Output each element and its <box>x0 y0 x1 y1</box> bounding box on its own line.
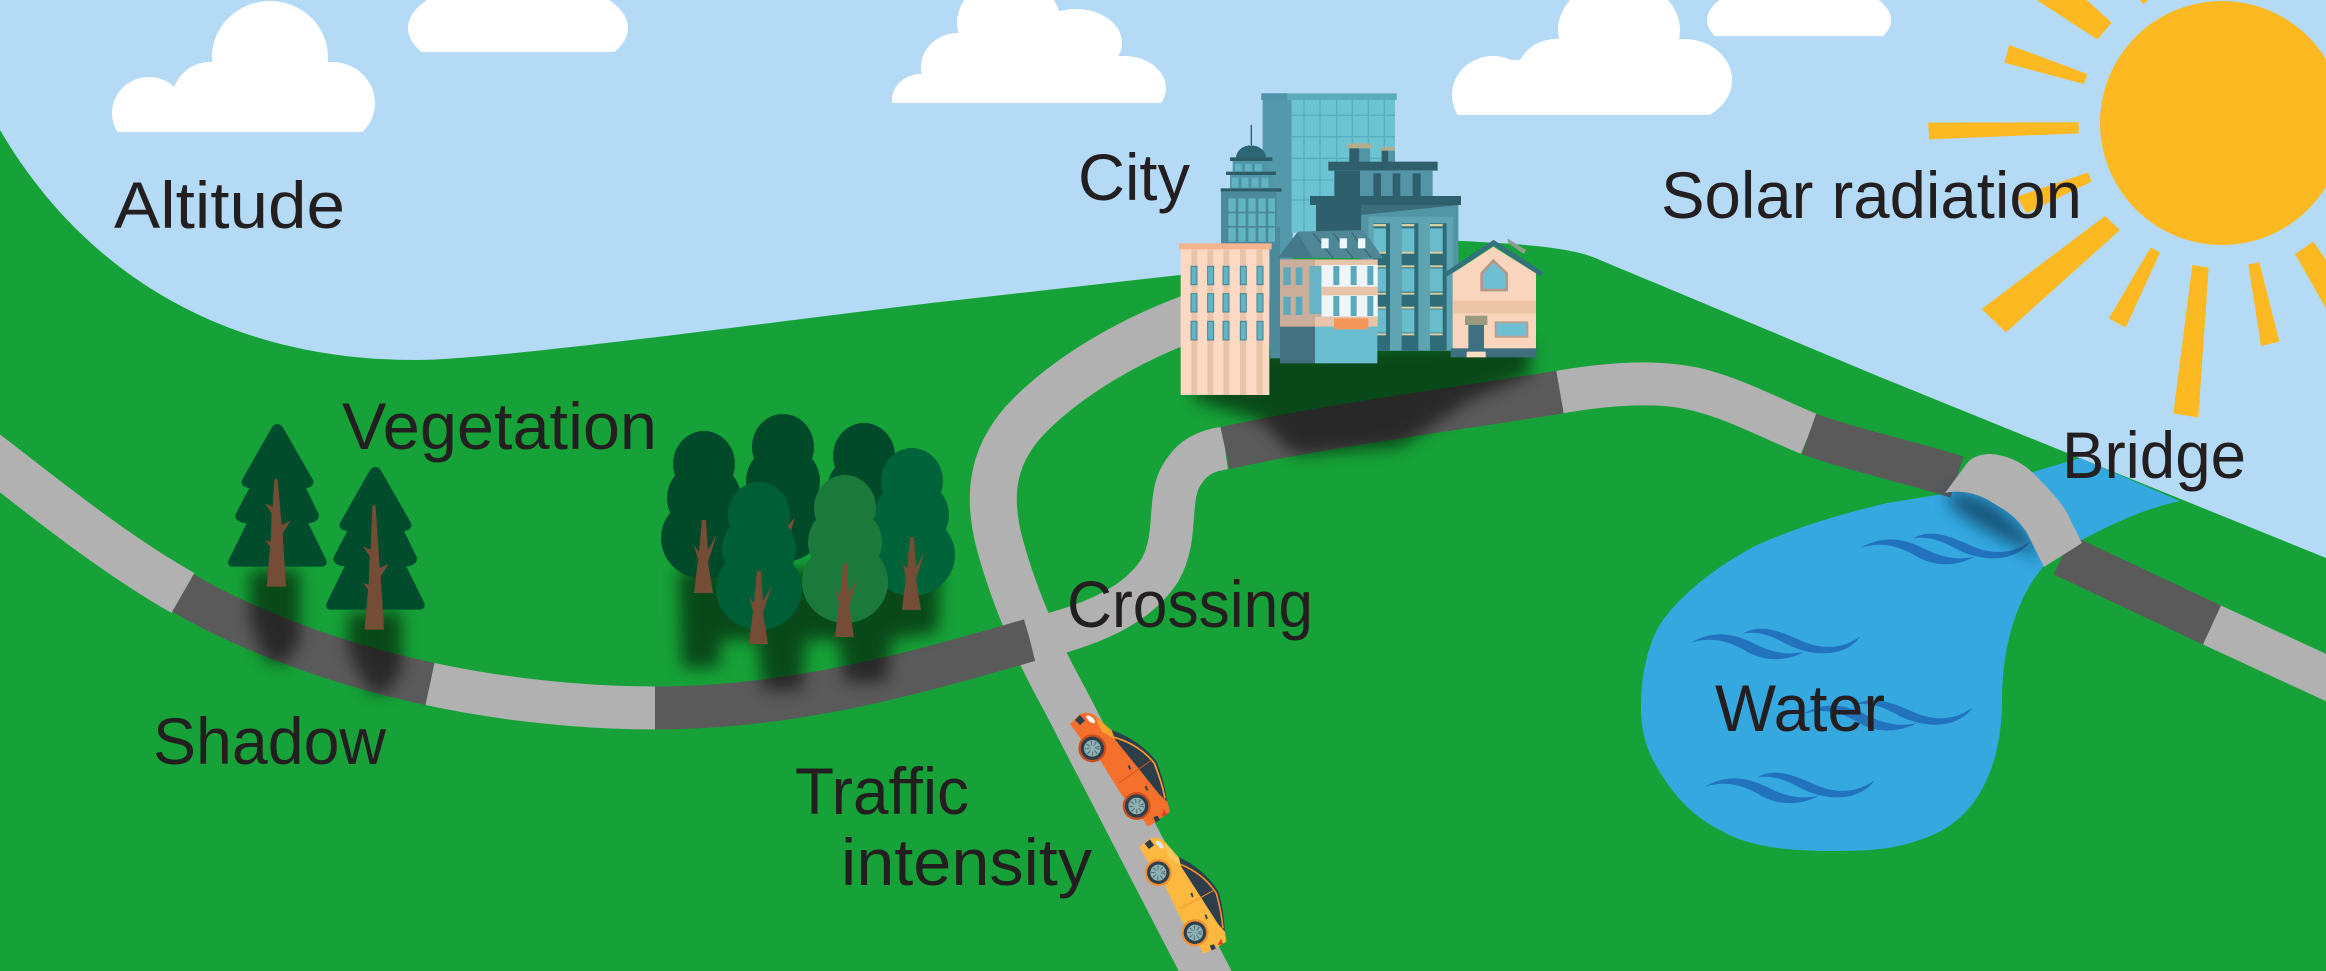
windows column 2 <box>1402 223 1418 351</box>
cloud 5 <box>1707 0 1891 36</box>
tree E <box>716 482 802 644</box>
label: Altitude: Altitude <box>114 168 345 242</box>
sun <box>1928 0 2326 418</box>
windows column 3 <box>1430 223 1447 351</box>
dark teal high-rise <box>1310 143 1461 351</box>
road: hill light segment <box>1560 384 1809 434</box>
road: right light segment <box>2212 625 2326 684</box>
pink building <box>1179 243 1272 395</box>
tree C <box>821 423 907 571</box>
cloud 3 <box>892 0 1166 103</box>
wave 2 <box>1861 534 2031 564</box>
bridge <box>1945 454 2082 567</box>
road: left light segment <box>0 448 183 593</box>
conifer tree 2 <box>326 467 425 630</box>
house <box>1446 238 1542 357</box>
orange car <box>1070 713 1170 827</box>
deciduous tree cluster <box>661 414 955 644</box>
deciduous shadows <box>678 570 940 690</box>
label: Crossing: Crossing <box>1067 567 1313 641</box>
road: dark segment after bridge <box>2063 555 2212 625</box>
wave 3 <box>1803 700 1973 731</box>
road network <box>0 318 2326 971</box>
label: intensity: intensity <box>841 825 1092 899</box>
tree B <box>740 414 826 562</box>
road: dark segment before bridge <box>1809 434 1957 477</box>
yellow car <box>1129 836 1237 956</box>
wave 1 <box>1691 629 1861 659</box>
label: Vegetation: Vegetation <box>342 389 657 463</box>
shadows of city and trees <box>250 340 1530 695</box>
river and lake <box>1641 458 2180 851</box>
trunk <box>363 505 389 630</box>
conifer tree 1 <box>228 424 327 587</box>
sun rays <box>1928 0 2326 418</box>
road: shadow dark segment <box>183 593 430 684</box>
trunk <box>265 479 291 587</box>
label: Solar radiation: Solar radiation <box>1661 158 2082 232</box>
cloud 2 <box>408 0 628 52</box>
city buildings <box>1179 93 1542 395</box>
city shadow <box>1195 340 1530 455</box>
label: Traffic: Traffic <box>795 754 969 828</box>
label: Water: Water <box>1715 671 1885 745</box>
water waves <box>1691 534 2031 803</box>
road: curve after crossing <box>1030 448 1225 640</box>
conifer shadows <box>250 570 402 695</box>
cloud 4 <box>1452 0 1732 115</box>
road: city dark segment <box>1225 392 1560 448</box>
domed tower <box>1221 125 1282 358</box>
label: Shadow: Shadow <box>153 704 386 778</box>
road: crossing branch to city <box>993 318 1215 971</box>
cloud 1 <box>112 1 375 132</box>
cars <box>1070 713 1237 956</box>
mid-rise with roof <box>1278 230 1383 363</box>
label: City: City <box>1078 140 1190 214</box>
road: centre light segment <box>430 684 655 708</box>
road: vegetation dark segment <box>655 640 1030 708</box>
tree A <box>661 431 747 593</box>
wave 4 <box>1705 773 1875 803</box>
tree D <box>869 448 955 610</box>
tree F <box>802 475 888 637</box>
label: Bridge: Bridge <box>2062 418 2246 492</box>
bridge shadow <box>1945 491 2040 560</box>
tree B branch <box>786 517 795 535</box>
labels <box>114 140 2246 899</box>
glass tower <box>1261 93 1397 301</box>
windows column 1 <box>1373 223 1390 351</box>
